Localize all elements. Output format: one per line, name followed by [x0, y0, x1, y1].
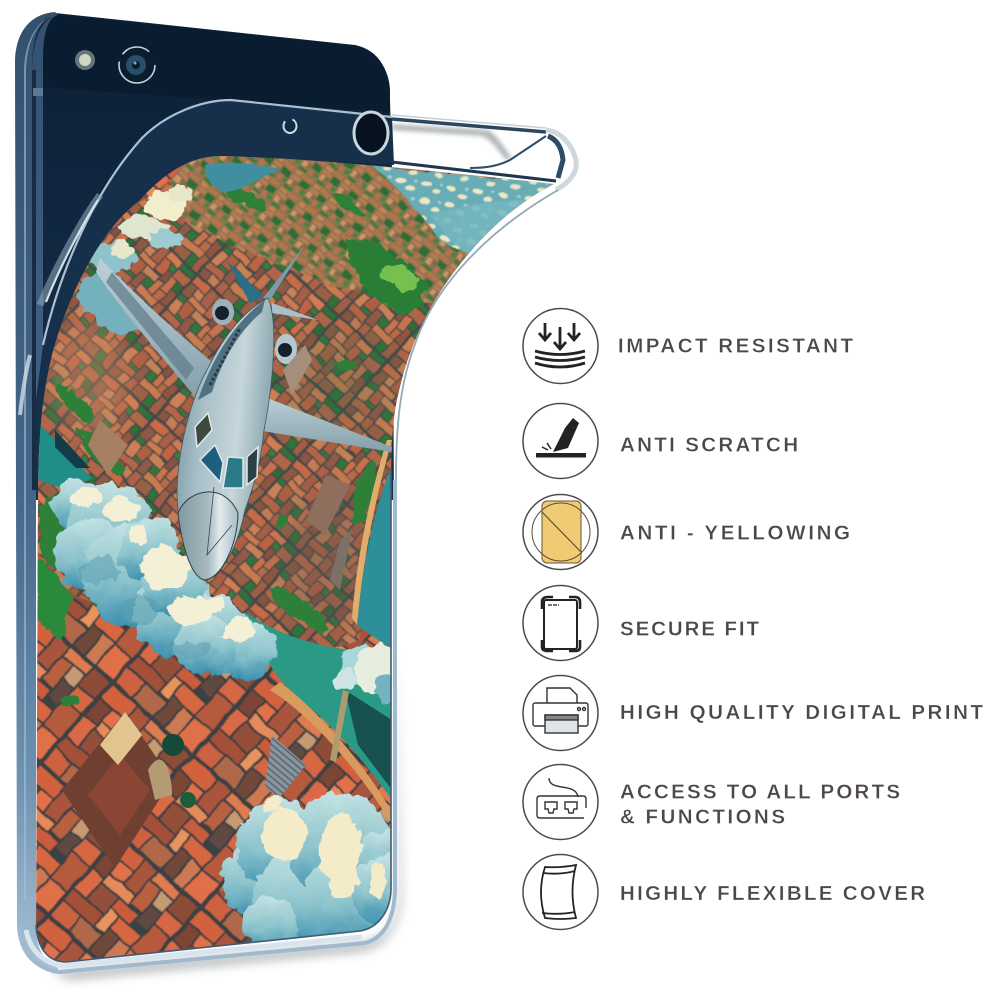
case interior over phone: [36, 100, 394, 500]
second side bump: [20, 355, 30, 415]
icon: phone with bumpers: [542, 597, 580, 651]
lower right cloud: [219, 790, 390, 942]
green patches: [39, 182, 383, 707]
top rim bar: [392, 119, 546, 132]
main cloud: [52, 479, 275, 680]
feature: flexible cover: [523, 854, 925, 930]
case top white opening: [392, 118, 574, 184]
curved rim right: [396, 190, 558, 480]
label: IMPACT RESISTANT: [618, 334, 853, 358]
case tip: [546, 130, 576, 190]
small right cloud: [332, 642, 390, 705]
sky haze: [430, 200, 530, 255]
river lower: [245, 612, 392, 800]
cockpit windows: [195, 413, 258, 488]
feature: ports: [523, 764, 900, 840]
window inner shadow: [392, 124, 512, 160]
feature: anti scratch: [523, 404, 798, 478]
feature: impact resistant: [523, 308, 853, 384]
case front edge: [19, 190, 558, 972]
lower bank: [270, 682, 392, 825]
fuselage dark side: [198, 300, 265, 400]
right sea: [357, 465, 392, 650]
label: HIGH QUALITY DIGITAL PRINT: [620, 701, 983, 724]
lower street blocks: [62, 712, 306, 868]
icon: impact arrows: [535, 323, 585, 367]
icon: bent cover: [541, 865, 576, 919]
tall buildings: [88, 345, 352, 590]
case rim outline: [43, 100, 392, 345]
feature: anti yellowing: [523, 494, 850, 570]
bridge: [330, 690, 349, 762]
fuselage: [177, 298, 274, 580]
feature: digital print: [523, 676, 983, 750]
inner bottom rim: [36, 470, 391, 962]
phone body: [15, 12, 402, 980]
engines: [212, 299, 234, 325]
label: SECURE FIT: [620, 618, 759, 640]
left side frame: [15, 12, 58, 974]
artwork: [36, 156, 554, 962]
window lower bar: [392, 162, 556, 181]
label: ANTI SCRATCH: [620, 434, 798, 456]
phone back panel: [17, 13, 394, 500]
feature list: [523, 308, 983, 930]
right wing: [262, 396, 392, 452]
far city: [160, 150, 480, 305]
feature: secure fit: [523, 586, 759, 660]
icon: port block: [537, 778, 586, 818]
label: ANTI - YELLOWING: [620, 522, 850, 544]
camera cutout ring: [354, 112, 388, 154]
flash: [75, 50, 95, 70]
icon: printer: [533, 688, 588, 733]
left wing: [96, 258, 212, 398]
label: HIGHLY FLEXIBLE COVER: [620, 882, 925, 905]
green shore left: [36, 560, 75, 640]
top bay: [205, 163, 282, 192]
icon: yellow case crossed: [532, 501, 590, 563]
airplane: [96, 245, 392, 580]
small upper clouds: [76, 184, 192, 335]
camera lens: [119, 47, 155, 83]
cabin windows: [210, 328, 240, 385]
city base: [36, 156, 554, 962]
label: & FUNCTIONS: [620, 806, 785, 828]
mid city: [30, 160, 480, 665]
icon: blade on surface: [536, 418, 586, 458]
case: [20, 100, 576, 500]
label: [620, 780, 900, 828]
tone washes: [50, 320, 390, 630]
case shadow: [50, 640, 402, 980]
nose cone: [178, 492, 238, 580]
side button bump: [40, 195, 100, 305]
diagonal fold: [470, 136, 546, 168]
glass camera band: [38, 15, 390, 112]
top sky band: [372, 166, 560, 255]
flash cutout ring: [284, 119, 296, 133]
left river: [38, 425, 92, 490]
label: ACCESS TO ALL PORTS: [620, 780, 900, 804]
park: [345, 238, 432, 314]
outer bottom rim: [19, 480, 395, 972]
tail fins: [227, 261, 264, 303]
